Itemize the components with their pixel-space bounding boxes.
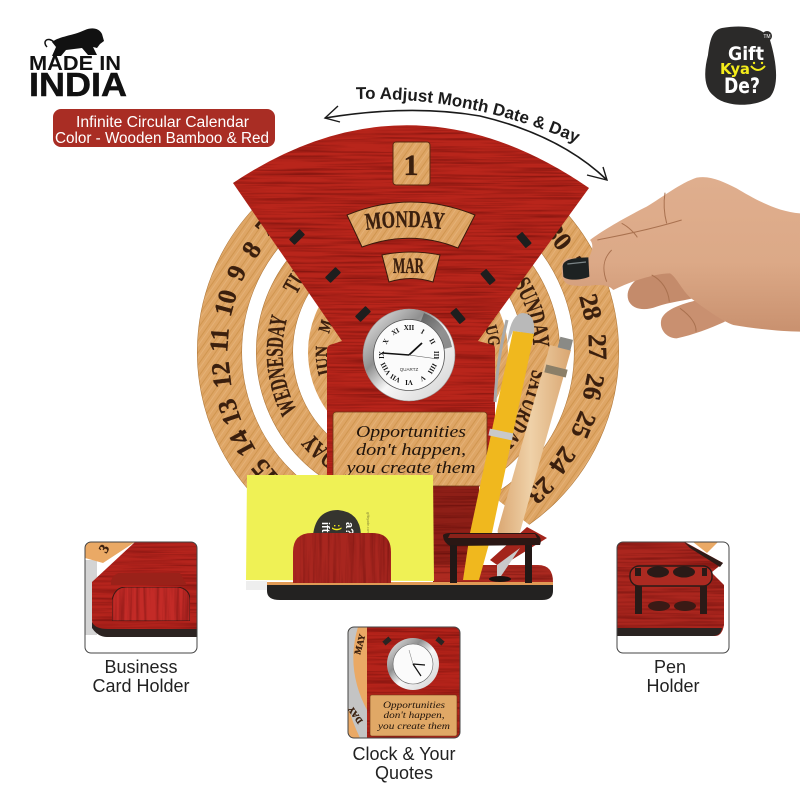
panel: circular calendar rings [197, 210, 619, 525]
business card: ift [319, 522, 331, 533]
analog quartz clock: VIII [379, 361, 393, 376]
business card [246, 475, 434, 581]
analog quartz clock: I [419, 328, 426, 336]
analog quartz clock: XII [404, 324, 415, 332]
panel: clock and quotes inset: don't happen, [384, 711, 444, 721]
day window [346, 202, 476, 249]
outer date ring: 9 [221, 261, 252, 285]
analog quartz clock: II [427, 337, 437, 346]
red rear wedge [490, 527, 547, 567]
outer date ring: 10 [208, 287, 243, 319]
outer date ring: 30 [539, 218, 578, 256]
quote plate: don't happen, [356, 440, 466, 459]
card holder front [293, 533, 391, 583]
panel: red wooden calendar body [233, 125, 589, 582]
middle day ring: SATURDAY [509, 370, 542, 451]
outer date ring: 7 [249, 213, 280, 242]
clock and quotes label: Quotes [375, 763, 433, 783]
panel: clock and quotes inset [343, 627, 460, 738]
business card holder label: Business [104, 657, 178, 677]
analog quartz clock: VII [389, 372, 402, 384]
month window [382, 252, 440, 282]
analog quartz clock [363, 309, 455, 401]
finger creases [597, 193, 696, 332]
curved arrow with caption: To Adjust Month Date & Day [356, 87, 580, 144]
business card: :) [331, 524, 342, 531]
analog quartz clock: X [381, 337, 391, 346]
outer date ring: 15 [245, 453, 284, 492]
panel: clock and quotes inset: Opportunities [383, 701, 445, 711]
curved arrow with caption [324, 87, 608, 181]
card logo peek [313, 510, 361, 535]
product title badge: Color - Wooden Bamboo & Red [55, 130, 269, 147]
analog quartz clock: QUARTZ [400, 367, 418, 372]
outer date ring: 8 [236, 236, 267, 263]
hand [562, 177, 800, 338]
quote plate: Opportunities [356, 422, 466, 441]
lower neck [433, 470, 479, 585]
analog quartz clock: IX [378, 351, 386, 359]
outer date ring: 23 [521, 471, 560, 510]
gift kya de logo [705, 26, 776, 105]
gift kya de logo: Kya [720, 60, 750, 78]
gift kya de logo: TM [763, 34, 771, 40]
panel: pen holder inset [617, 542, 729, 653]
day window: MONDAY [364, 211, 446, 230]
analog quartz clock: V [418, 373, 427, 383]
product title badge [53, 109, 275, 147]
inner month ring: MAY [318, 318, 332, 334]
product title badge: Infinite Circular Calendar [76, 114, 249, 131]
outer date ring: 12 [206, 360, 237, 390]
outer date ring: 24 [543, 441, 582, 479]
outer date ring: 28 [573, 291, 608, 323]
clock and quotes label: Clock & Your [352, 744, 456, 764]
middle day ring: SUNDAY [516, 277, 550, 346]
business card: a? [343, 522, 355, 535]
middle day ring [256, 260, 560, 475]
lower finger [661, 299, 725, 338]
india text: INDIA [29, 66, 127, 103]
panel: business card holder inset [85, 542, 197, 653]
middle day ring: WEDNESDAY [266, 314, 296, 418]
icon: lion [45, 28, 104, 56]
outer date ring: 29 [559, 252, 596, 288]
gift kya de logo: De? [724, 74, 760, 98]
analog quartz clock: IIII [426, 362, 438, 375]
analog quartz clock: VI [405, 378, 413, 386]
made in text: MADE IN [29, 53, 121, 75]
date window: 1 [404, 149, 418, 182]
pen holder label: Holder [646, 676, 700, 696]
inner month ring [308, 307, 508, 410]
inner month ring: AUG [486, 318, 500, 346]
panel: clock and quotes inset: MAY [352, 632, 367, 656]
inner month ring: JUN [316, 346, 328, 376]
month window: MAR [393, 253, 425, 278]
middle finger [628, 270, 700, 309]
wooden base [246, 565, 553, 600]
made in india logo [29, 28, 127, 103]
outer date ring: 25 [565, 408, 602, 443]
analog quartz clock: III [432, 351, 440, 359]
panel: business card holder inset: 3 [97, 542, 113, 556]
business card: giftkyade.com [366, 512, 370, 534]
pen: yellow [463, 313, 534, 580]
pen holder label: Pen [654, 657, 686, 677]
gift kya de logo: Gift [728, 43, 764, 65]
outer date ring [197, 210, 619, 525]
date window [393, 142, 430, 185]
middle day ring: TUESDAY [282, 270, 302, 294]
middle day ring: MONDAY [300, 435, 327, 468]
panel: clock and quotes inset: you create them [377, 722, 450, 732]
outer date ring: 11 [204, 327, 235, 353]
analog quartz clock: XI [390, 326, 401, 337]
quote plate: you create them [344, 458, 476, 477]
quote plate [333, 412, 487, 486]
panel: clock and quotes inset: DAY [345, 704, 365, 726]
outer date ring: 13 [212, 395, 247, 429]
fan and clock body [233, 125, 589, 482]
business card holder label: Card Holder [92, 676, 190, 696]
outer date ring: 14 [224, 425, 262, 462]
outer date ring: 26 [577, 372, 610, 403]
icon: black nail [563, 257, 589, 280]
palm and thumb [562, 177, 800, 332]
black tabs [289, 229, 532, 324]
pen holder [443, 533, 541, 583]
pen: wooden [498, 337, 573, 538]
outer date ring: 27 [583, 333, 612, 360]
